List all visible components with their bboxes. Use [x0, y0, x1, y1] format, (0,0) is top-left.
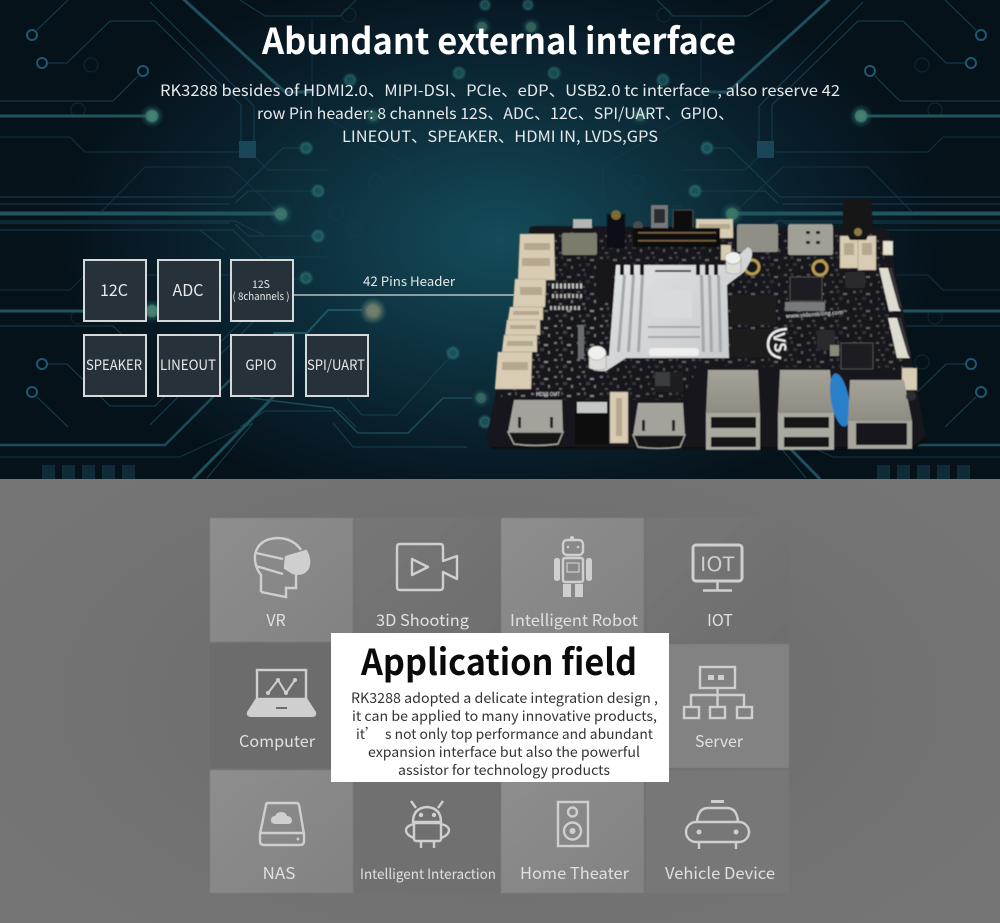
cell labels: Vehicle Device	[665, 860, 775, 884]
cell labels: 3D Shooting	[376, 607, 469, 631]
heatsink	[590, 247, 752, 371]
interface box grid: LINEOUT	[160, 355, 216, 375]
optical port	[577, 402, 607, 413]
card text block: assistor for technology products	[398, 760, 610, 780]
circuit board trace pattern	[0, 0, 1000, 479]
interface box grid: 12S	[252, 277, 270, 292]
logo and silkscreen: HDMI OUT	[536, 391, 560, 398]
interface box grid	[84, 260, 368, 396]
interface box grid: SPEAKER	[86, 355, 142, 375]
top connectors	[562, 233, 597, 255]
cell labels: Intelligent Robot	[510, 607, 638, 631]
interface box grid: 12C	[100, 277, 128, 301]
panel: interface background	[0, 0, 1000, 479]
logo and silkscreen: www.videostrong.com	[786, 308, 843, 320]
cell labels: IOT	[707, 607, 733, 631]
intro text block	[160, 79, 840, 147]
card text block: expansion interface but also the powerful	[368, 742, 640, 762]
cell labels: Server	[695, 728, 744, 752]
intro text block: row Pin header: 8 channels 12S、ADC、12C、SPI/UART、GPIO、	[257, 102, 734, 124]
logo and silkscreen: VS	[768, 331, 794, 353]
icon: robot	[554, 536, 592, 597]
cell labels: VR	[266, 607, 286, 631]
card text block	[351, 688, 658, 780]
card text block: it can be applied to many innovative products,	[352, 706, 657, 726]
interface box grid: ADC	[173, 277, 203, 301]
USB stacks	[706, 370, 834, 450]
icon: video camera	[397, 544, 457, 590]
card text block: RK3288 adopted a delicate integration design ,	[351, 688, 658, 708]
logo and silkscreen	[536, 308, 843, 398]
icon: IOT monitor	[693, 545, 742, 590]
icon: VR headset	[255, 538, 309, 597]
interface box grid: SPI/UART	[307, 355, 365, 375]
panel: application field background	[0, 479, 1000, 923]
circuit board photo illustration	[487, 200, 925, 450]
icon: vehicle	[686, 802, 749, 849]
icon: android robot	[406, 801, 449, 848]
heatsink posts	[588, 252, 741, 370]
RJ45	[848, 380, 912, 421]
FPC sockets	[879, 268, 901, 311]
cell labels	[239, 607, 775, 884]
icon: laptop	[247, 670, 316, 717]
application cell grid	[210, 518, 789, 893]
icon: IOT monitor: IOT	[700, 548, 735, 577]
HDMI ports	[508, 400, 563, 432]
cell labels: Intelligent Interaction	[360, 864, 496, 884]
panel: application field card	[331, 633, 669, 782]
intro text block: RK3288 besides of HDMI2.0、MIPI-DSI、PCIe、eDP、USB2.0 tc interface , also reserve 42	[160, 79, 840, 101]
icon: speaker	[558, 802, 588, 846]
cell labels: NAS	[262, 860, 296, 884]
cream connectors	[495, 219, 917, 443]
card text block: it’ s not only top performance and abundant	[356, 724, 654, 744]
title: Abundant external interface	[261, 13, 736, 65]
cell labels: Home Theater	[520, 860, 630, 884]
icon: server network	[684, 667, 752, 718]
intro text block: LINEOUT、SPEAKER、HDMI IN, LVDS,GPS	[342, 125, 658, 147]
icon: NAS drive	[260, 803, 304, 845]
cell labels: Computer	[239, 728, 316, 752]
heading: Application field	[360, 634, 637, 686]
chips and ICs	[550, 262, 873, 392]
interface box grid: ( 8channels )	[232, 289, 290, 304]
small surface components	[500, 232, 905, 400]
connector line: 42 pins header: 42 Pins Header	[363, 271, 456, 290]
interface box grid: GPIO	[246, 355, 276, 375]
